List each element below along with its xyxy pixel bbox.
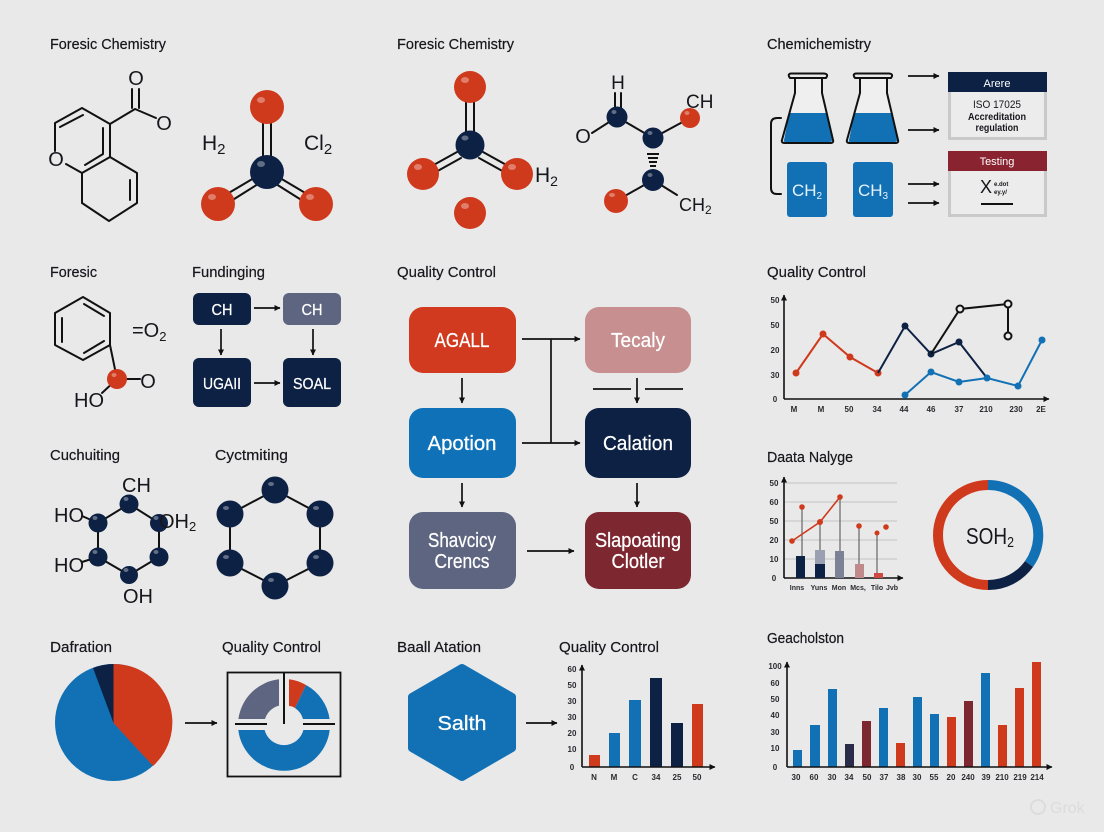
bar chart: 50 — [863, 773, 872, 782]
bar chart: N — [591, 773, 597, 782]
donut gauge: SOH2 — [938, 485, 1038, 585]
CH2 tile: CH — [792, 181, 816, 200]
box: CH navy — [193, 293, 251, 325]
bar chart: 0 — [773, 763, 778, 772]
heading: Quality Control — [559, 639, 659, 656]
bar chart: 50 — [771, 695, 780, 704]
heading: Chemichemistry — [767, 36, 871, 53]
icon: flask 2 — [847, 74, 898, 143]
panel: quality control flowchart — [397, 264, 691, 589]
combo chart: 20 — [770, 536, 779, 545]
panel: second ball and stick molecule — [397, 36, 713, 229]
bar chart: 60 — [568, 665, 577, 674]
report card: testing: e.dot — [994, 182, 1008, 188]
skeletal molecule: O — [48, 149, 64, 171]
arrows to reports — [908, 76, 939, 203]
chain molecule: H — [611, 73, 625, 94]
panel: geacholston bar chart — [767, 630, 1052, 782]
line chart: 37 — [955, 405, 964, 414]
bar chart: 37 — [880, 773, 889, 782]
bar chart: 50 — [568, 681, 577, 690]
box: SOAL: SOAL — [293, 376, 331, 393]
label: =O2: =O — [132, 320, 159, 342]
line chart: 44 — [900, 405, 909, 414]
ring molecule: 2 — [189, 519, 196, 534]
series: blue — [902, 336, 1046, 398]
report card: accreditation: Accreditation — [968, 111, 1026, 123]
ring molecule — [54, 475, 196, 608]
line chart: 50 — [771, 321, 780, 330]
bar chart: 100 — [768, 662, 782, 671]
report card: accreditation: Arere — [984, 78, 1010, 90]
bar chart: 20 — [568, 729, 577, 738]
step: Shavcicy Crencs — [409, 512, 516, 589]
bar chart — [768, 662, 1052, 782]
combo chart: 10 — [770, 555, 779, 564]
line chart: 230 — [1009, 405, 1023, 414]
bar chart: 30 — [568, 697, 577, 706]
bar chart: 39 — [982, 773, 991, 782]
watermark — [1031, 800, 1086, 817]
step: Calation: Calation — [603, 433, 673, 455]
heading: Daata Nalyge — [767, 449, 853, 466]
report card: accreditation: ISO 17025 — [973, 99, 1021, 111]
hexagonal ring of atoms — [216, 476, 334, 600]
segmented donut in frame — [228, 672, 340, 776]
box: UGAII — [193, 358, 251, 407]
arrow — [526, 722, 557, 724]
heading: Quality Control — [222, 639, 321, 656]
heading: Baall Atation — [397, 639, 481, 656]
heading: Dafration — [50, 639, 112, 656]
combo chart — [770, 477, 903, 592]
panel: benzene molecule — [50, 264, 166, 412]
combo chart: 50 — [770, 479, 779, 488]
label: H2: 2 — [550, 173, 558, 189]
line chart: M — [791, 405, 798, 414]
box: SOAL — [283, 358, 341, 407]
label: H2: H — [202, 132, 217, 155]
panel: ring molecule with labels — [50, 447, 196, 608]
box: CH navy: CH — [212, 302, 232, 319]
label: H2: H — [535, 164, 550, 187]
ball and stick molecule — [201, 90, 333, 221]
chain molecule: CH — [679, 195, 705, 215]
pie chart — [55, 664, 172, 781]
chain molecule — [575, 73, 713, 217]
bar chart: M — [611, 773, 618, 782]
panel: hexagon — [397, 639, 557, 777]
line chart: 20 — [771, 346, 780, 355]
bar chart: 50 — [693, 773, 702, 782]
bar chart: 30 — [792, 773, 801, 782]
benzene ring with hydroxyl: O — [140, 371, 156, 393]
combo chart: 0 — [772, 574, 777, 583]
flow arrows — [462, 339, 683, 551]
combo chart: Jvb — [886, 585, 898, 592]
chain molecule: 2 — [705, 203, 712, 217]
CH3 tile: 3 — [882, 191, 888, 202]
bar chart: 10 — [771, 744, 780, 753]
bar chart: 30 — [568, 713, 577, 722]
step: Calation — [585, 408, 691, 478]
bar chart: 20 — [947, 773, 956, 782]
bar chart: 0 — [570, 763, 575, 772]
line chart: 30 — [771, 371, 780, 380]
line chart — [771, 295, 1049, 414]
CH3 tile — [853, 162, 893, 217]
bar chart: C — [632, 773, 638, 782]
report card: testing — [948, 151, 1047, 216]
series: open markers — [931, 300, 1012, 354]
chain molecule: O — [575, 126, 591, 148]
benzene ring with hydroxyl — [55, 297, 156, 412]
line chart: 46 — [927, 405, 936, 414]
step: Tecaly — [585, 307, 691, 373]
combo chart: Inns — [790, 585, 804, 592]
bar chart: 10 — [568, 745, 577, 754]
combo chart: Tilo — [871, 585, 883, 592]
label: Cl2: Cl — [304, 132, 324, 155]
label: Cl2: 2 — [324, 141, 332, 158]
skeletal molecule — [48, 68, 172, 221]
step: AGALL — [409, 307, 516, 373]
hexagon: Salth — [412, 668, 512, 777]
line chart: M — [818, 405, 825, 414]
bar chart: 60 — [771, 679, 780, 688]
panel: cyclic molecule — [215, 447, 334, 600]
heading: Foresic — [50, 264, 97, 281]
bar chart: 25 — [673, 773, 682, 782]
flow arrows — [221, 308, 313, 383]
panel: quality control line chart — [767, 264, 1049, 414]
CH3 tile: CH — [858, 181, 882, 200]
panel: ball and stick molecule with H2 and Cl2 — [201, 90, 333, 221]
combo chart: Mcs, — [850, 585, 866, 592]
donut gauge: SOH2: 2 — [1007, 534, 1014, 551]
bar chart: 34 — [652, 773, 661, 782]
report card: testing: ey.y/ — [994, 190, 1007, 196]
box: CH gray — [283, 293, 341, 325]
step: Apotion: Apotion — [428, 433, 496, 455]
CH2 tile — [787, 162, 827, 217]
report card: testing: Testing — [980, 156, 1014, 168]
box: UGAII: UGAII — [203, 376, 241, 393]
watermark: Grok — [1050, 800, 1086, 817]
bar chart: 38 — [897, 773, 906, 782]
combo chart: Mon — [832, 585, 846, 592]
line chart: 50 — [845, 405, 854, 414]
hexagon: Salth: Salth — [438, 713, 486, 735]
panel: chemichemistry flasks and reports — [767, 36, 1047, 217]
step: Slapoating Clotler: Clotler — [612, 551, 665, 573]
line chart: 2E — [1036, 405, 1047, 414]
heading: Foresic Chemistry — [397, 36, 514, 53]
bar chart: 30 — [828, 773, 837, 782]
bar chart: 60 — [810, 773, 819, 782]
line chart: 210 — [979, 405, 993, 414]
box: CH gray: CH — [302, 302, 322, 319]
line chart: 0 — [773, 395, 778, 404]
panel: quality control segmented donut — [222, 639, 340, 776]
report card: accreditation: regulation — [976, 122, 1018, 134]
series: red — [792, 330, 882, 376]
step: Apotion — [409, 408, 516, 478]
line chart: 50 — [771, 296, 780, 305]
heading: Cuchuiting — [50, 447, 120, 464]
heading: Cyctmiting — [215, 447, 288, 464]
heading: Quality Control — [397, 264, 496, 281]
step: Slapoating Clotler — [585, 512, 691, 589]
ring molecule: CH — [122, 475, 151, 497]
bar chart: 34 — [845, 773, 854, 782]
skeletal molecule: O — [156, 113, 172, 135]
report card: testing: X — [980, 177, 992, 197]
ring molecule: OH — [159, 511, 189, 533]
CH2 tile: 2 — [816, 191, 822, 202]
panel: pie chart — [50, 639, 217, 781]
skeletal molecule: O — [128, 68, 144, 90]
panel: funding flow — [192, 264, 341, 407]
heading: Fundinging — [192, 264, 265, 281]
arrow — [185, 722, 217, 724]
bar chart: 240 — [961, 773, 975, 782]
report card: accreditation — [948, 72, 1047, 138]
bar chart: 214 — [1030, 773, 1044, 782]
combo chart: 50 — [770, 517, 779, 526]
ring molecule: OH — [123, 586, 153, 608]
bar chart: 30 — [913, 773, 922, 782]
bar chart: 40 — [771, 711, 780, 720]
ring molecule: HO — [54, 555, 84, 577]
step: Shavcicy Crencs: Shavcicy — [428, 530, 496, 552]
step: AGALL: AGALL — [434, 330, 490, 352]
series: navy — [878, 322, 987, 378]
line chart: 34 — [873, 405, 882, 414]
bar chart: 219 — [1013, 773, 1027, 782]
bar chart: 30 — [771, 728, 780, 737]
combo chart: 60 — [770, 498, 779, 507]
label: =O2: 2 — [159, 329, 166, 344]
step: Tecaly: Tecaly — [611, 330, 665, 352]
panel: quality control bar chart — [559, 639, 715, 782]
step: Slapoating Clotler: Slapoating — [595, 530, 681, 552]
icon: flask 1 — [782, 74, 833, 143]
donut gauge: SOH2: SOH — [966, 523, 1016, 549]
bar chart: 55 — [930, 773, 939, 782]
ball and stick molecule — [407, 71, 533, 229]
bar chart: 210 — [995, 773, 1009, 782]
chain molecule: CH — [686, 92, 713, 113]
bar chart — [568, 665, 715, 782]
heading: Geacholston — [767, 630, 844, 647]
label: H2: 2 — [217, 141, 226, 158]
heading: Quality Control — [767, 264, 866, 281]
ring molecule: HO — [54, 505, 84, 527]
panel: fused ring molecule — [48, 36, 172, 221]
benzene ring with hydroxyl: HO — [74, 390, 104, 412]
step: Shavcicy Crencs: Crencs — [434, 551, 490, 573]
heading: Foresic Chemistry — [50, 36, 166, 53]
bracket — [771, 118, 781, 194]
panel: data analysis — [767, 449, 1038, 592]
combo chart: Yuns — [811, 585, 827, 592]
